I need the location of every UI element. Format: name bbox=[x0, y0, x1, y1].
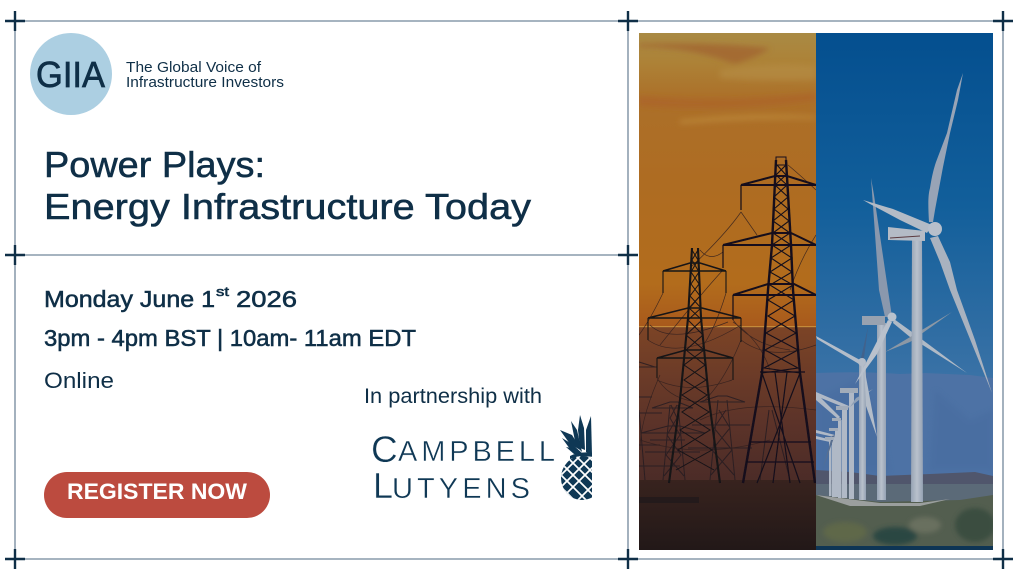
mountains bbox=[816, 372, 993, 482]
logo wordmark: GIIA bbox=[36, 54, 105, 95]
main pylon bbox=[723, 157, 816, 483]
distant pylons bbox=[639, 362, 790, 480]
register button bbox=[44, 472, 270, 518]
main turbine bbox=[863, 73, 992, 502]
main tower bbox=[911, 237, 923, 502]
sky bbox=[816, 33, 993, 378]
wordmark: L bbox=[373, 465, 393, 506]
GIIA logo bbox=[30, 33, 112, 115]
distant hills bbox=[816, 470, 993, 484]
photo panel: wind turbines bbox=[816, 33, 995, 550]
tagline bbox=[126, 60, 284, 91]
nacelle bbox=[888, 227, 925, 241]
wordmark bbox=[371, 429, 555, 506]
event date: Monday June 1 bbox=[44, 286, 215, 312]
hub bbox=[928, 222, 942, 236]
icon: pineapple bbox=[560, 415, 592, 500]
title: Energy Infrastructure Today bbox=[44, 186, 531, 227]
tagline: The Global Voice of bbox=[126, 60, 262, 76]
ground bbox=[639, 480, 816, 550]
rotor blades bbox=[928, 73, 963, 222]
ground scrub bbox=[816, 495, 993, 546]
clouds bbox=[639, 44, 816, 124]
logo circle bbox=[30, 33, 112, 115]
title bbox=[44, 144, 531, 227]
photo panel: electricity pylons at sunset bbox=[639, 33, 816, 550]
wordmark: AMPBELL bbox=[398, 436, 555, 468]
event location: Online bbox=[44, 368, 114, 393]
title: Power Plays: bbox=[44, 144, 265, 185]
far turbines bbox=[816, 388, 873, 499]
event date bbox=[44, 284, 297, 312]
wordmark: UTYENS bbox=[392, 473, 530, 505]
event date: 2026 bbox=[236, 286, 297, 312]
third turbine bbox=[816, 327, 877, 500]
register button: REGISTER NOW bbox=[67, 479, 247, 504]
partnership label: In partnership with bbox=[364, 385, 542, 408]
wordmark: C bbox=[371, 429, 398, 470]
second pylon bbox=[648, 248, 741, 483]
sky bbox=[639, 33, 816, 328]
event date: st bbox=[216, 284, 229, 299]
event time: 3pm - 4pm BST | 10am- 11am EDT bbox=[44, 325, 416, 351]
tagline: Infrastructure Investors bbox=[126, 75, 284, 91]
Campbell Lutyens logo bbox=[372, 415, 592, 500]
power lines bbox=[639, 165, 816, 450]
second turbine bbox=[855, 178, 967, 500]
